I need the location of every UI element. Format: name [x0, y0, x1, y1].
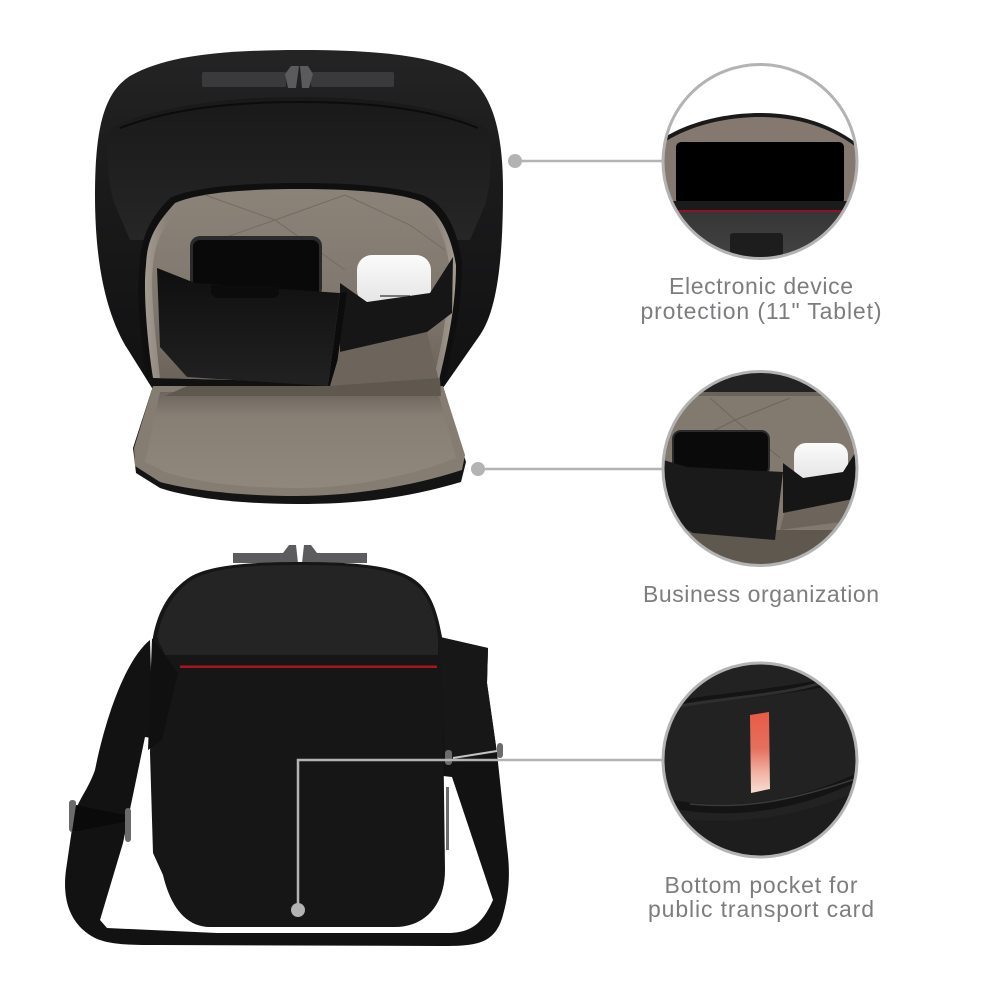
callout circle: tablet protection — [660, 60, 860, 263]
left pocket — [157, 268, 340, 386]
callout circle: business organization — [660, 370, 860, 570]
interior lining — [138, 183, 462, 388]
callout text: tablet protection: Electronic device — [669, 273, 853, 299]
zipper pulls — [233, 545, 367, 563]
phone — [190, 236, 322, 298]
shoulder bag illustration — [65, 545, 509, 946]
callout text: transport card pocket: public transport card — [648, 896, 874, 922]
callout text: transport card pocket: Bottom pocket for — [664, 872, 858, 898]
body — [150, 562, 445, 927]
leader dots — [291, 154, 522, 917]
leader lines — [298, 161, 663, 910]
open bag illustration — [95, 50, 503, 504]
zipper pulls — [202, 66, 394, 88]
callout circle: transport card pocket — [660, 660, 860, 860]
floor of interior — [330, 332, 440, 386]
strap panel and buckles — [440, 637, 497, 765]
bag shell — [95, 50, 503, 388]
airpods case — [357, 255, 431, 305]
lower flap — [133, 378, 466, 504]
right pocket — [340, 257, 453, 352]
callout text: tablet protection: protection (11" Tablet) — [640, 298, 882, 324]
white gap inside strap — [100, 737, 493, 933]
strap — [65, 637, 509, 946]
callout text: business organization: Business organization — [643, 581, 879, 607]
